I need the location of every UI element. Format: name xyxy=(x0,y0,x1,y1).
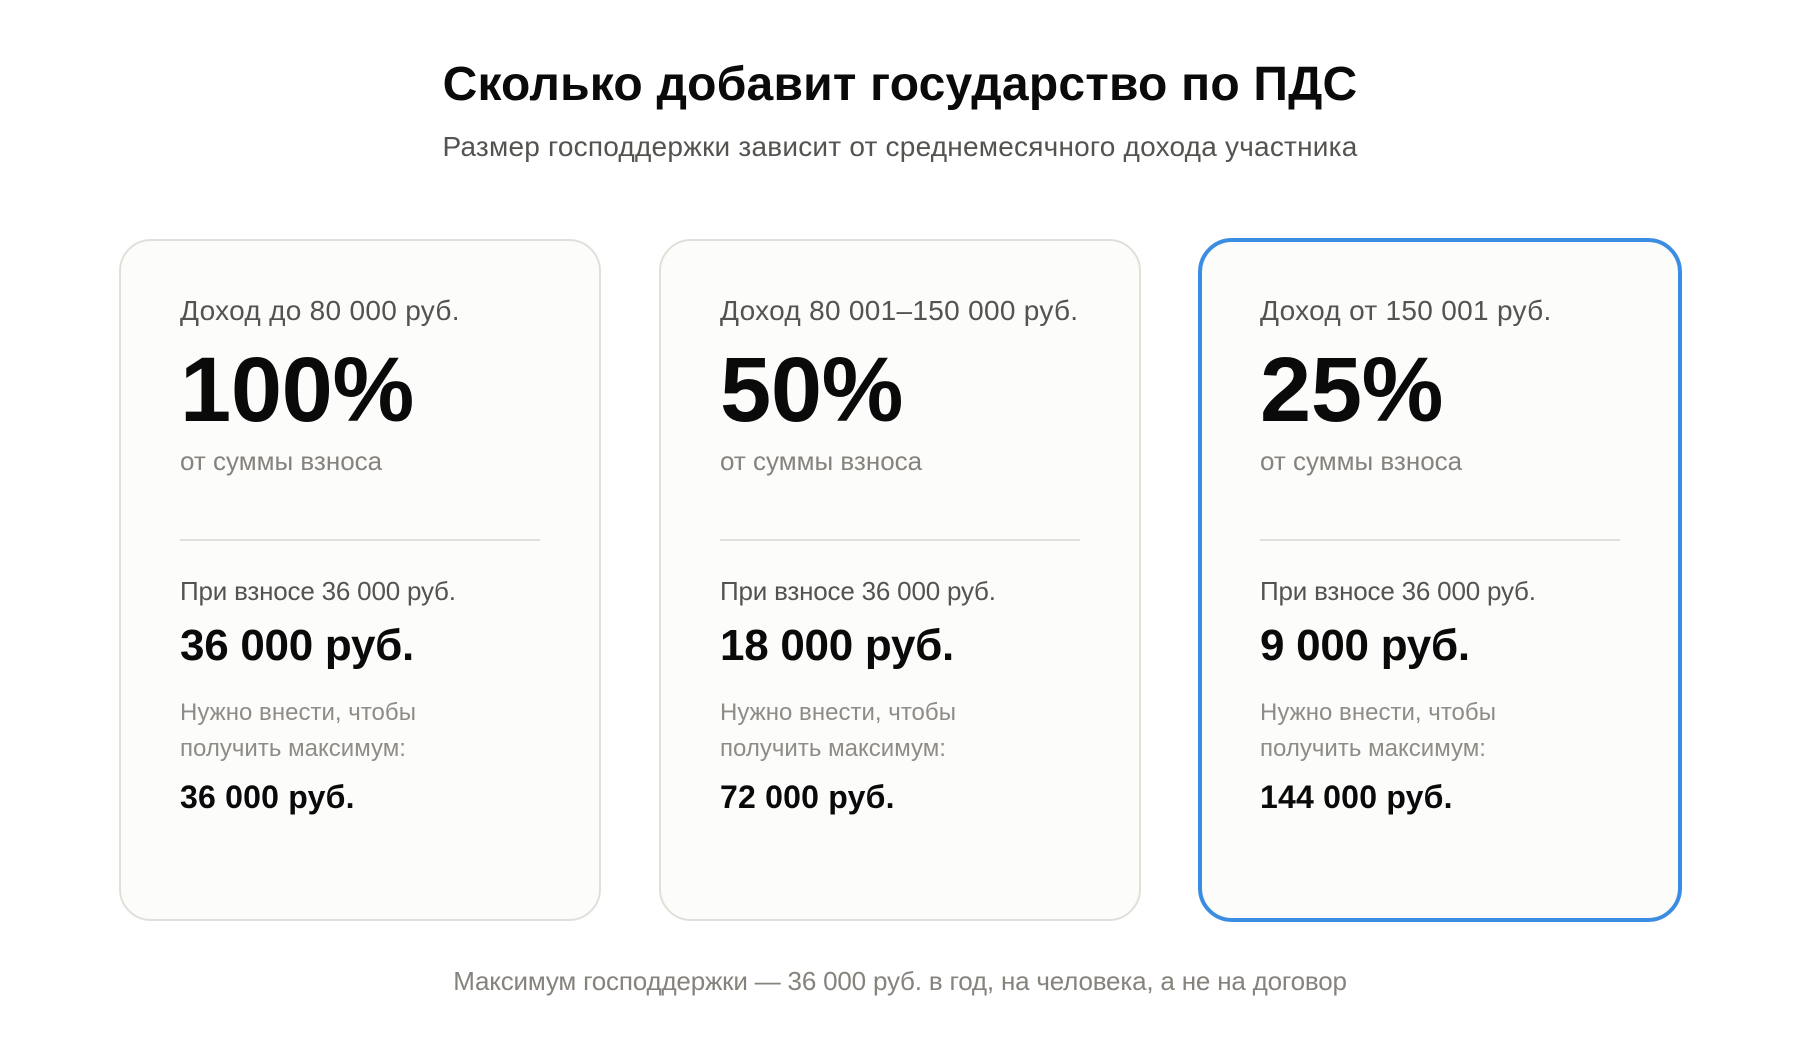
income label: Доход 80 001–150 000 руб. xyxy=(720,295,1078,326)
footnote: Максимум господдержки — 36 000 руб. в год, на человека, а не на договор xyxy=(453,966,1347,996)
percentage caption: от суммы взноса xyxy=(720,446,922,476)
panel: income 80 001–150 000 xyxy=(659,239,1141,921)
maximum caption: получить максимум: xyxy=(720,734,946,762)
percentage caption: от суммы взноса xyxy=(1260,446,1462,476)
maximum caption: Нужно внести, чтобы xyxy=(720,698,956,726)
panel: income from 150 001 (highlighted) xyxy=(1198,238,1682,922)
maximum amount: 72 000 руб. xyxy=(720,779,895,815)
state contribution amount: 18 000 руб. xyxy=(720,621,954,670)
percentage caption: от суммы взноса xyxy=(180,446,382,476)
maximum caption xyxy=(1260,698,1496,762)
maximum caption: Нужно внести, чтобы xyxy=(180,698,416,726)
maximum amount: 36 000 руб. xyxy=(180,779,355,815)
income label: Доход до 80 000 руб. xyxy=(180,295,460,326)
percentage: 25% xyxy=(1260,339,1443,441)
percentage: 100% xyxy=(180,339,414,441)
maximum caption: получить максимум: xyxy=(180,734,406,762)
maximum caption: Нужно внести, чтобы xyxy=(1260,698,1496,726)
maximum amount: 144 000 руб. xyxy=(1260,779,1453,815)
income label: Доход от 150 001 руб. xyxy=(1260,295,1552,326)
percentage: 50% xyxy=(720,339,903,441)
contribution label: При взносе 36 000 руб. xyxy=(180,576,456,606)
title: Сколько добавит государство по ПДС xyxy=(443,58,1357,111)
contribution label: При взносе 36 000 руб. xyxy=(1260,576,1536,606)
contribution label: При взносе 36 000 руб. xyxy=(720,576,996,606)
state contribution amount: 36 000 руб. xyxy=(180,621,414,670)
state contribution amount: 9 000 руб. xyxy=(1260,621,1470,670)
maximum caption xyxy=(720,698,956,762)
panel: income up to 80 000 xyxy=(119,239,601,921)
maximum caption: получить максимум: xyxy=(1260,734,1486,762)
subtitle: Размер господдержки зависит от среднемесячного дохода участника xyxy=(442,131,1358,162)
maximum caption xyxy=(180,698,416,762)
